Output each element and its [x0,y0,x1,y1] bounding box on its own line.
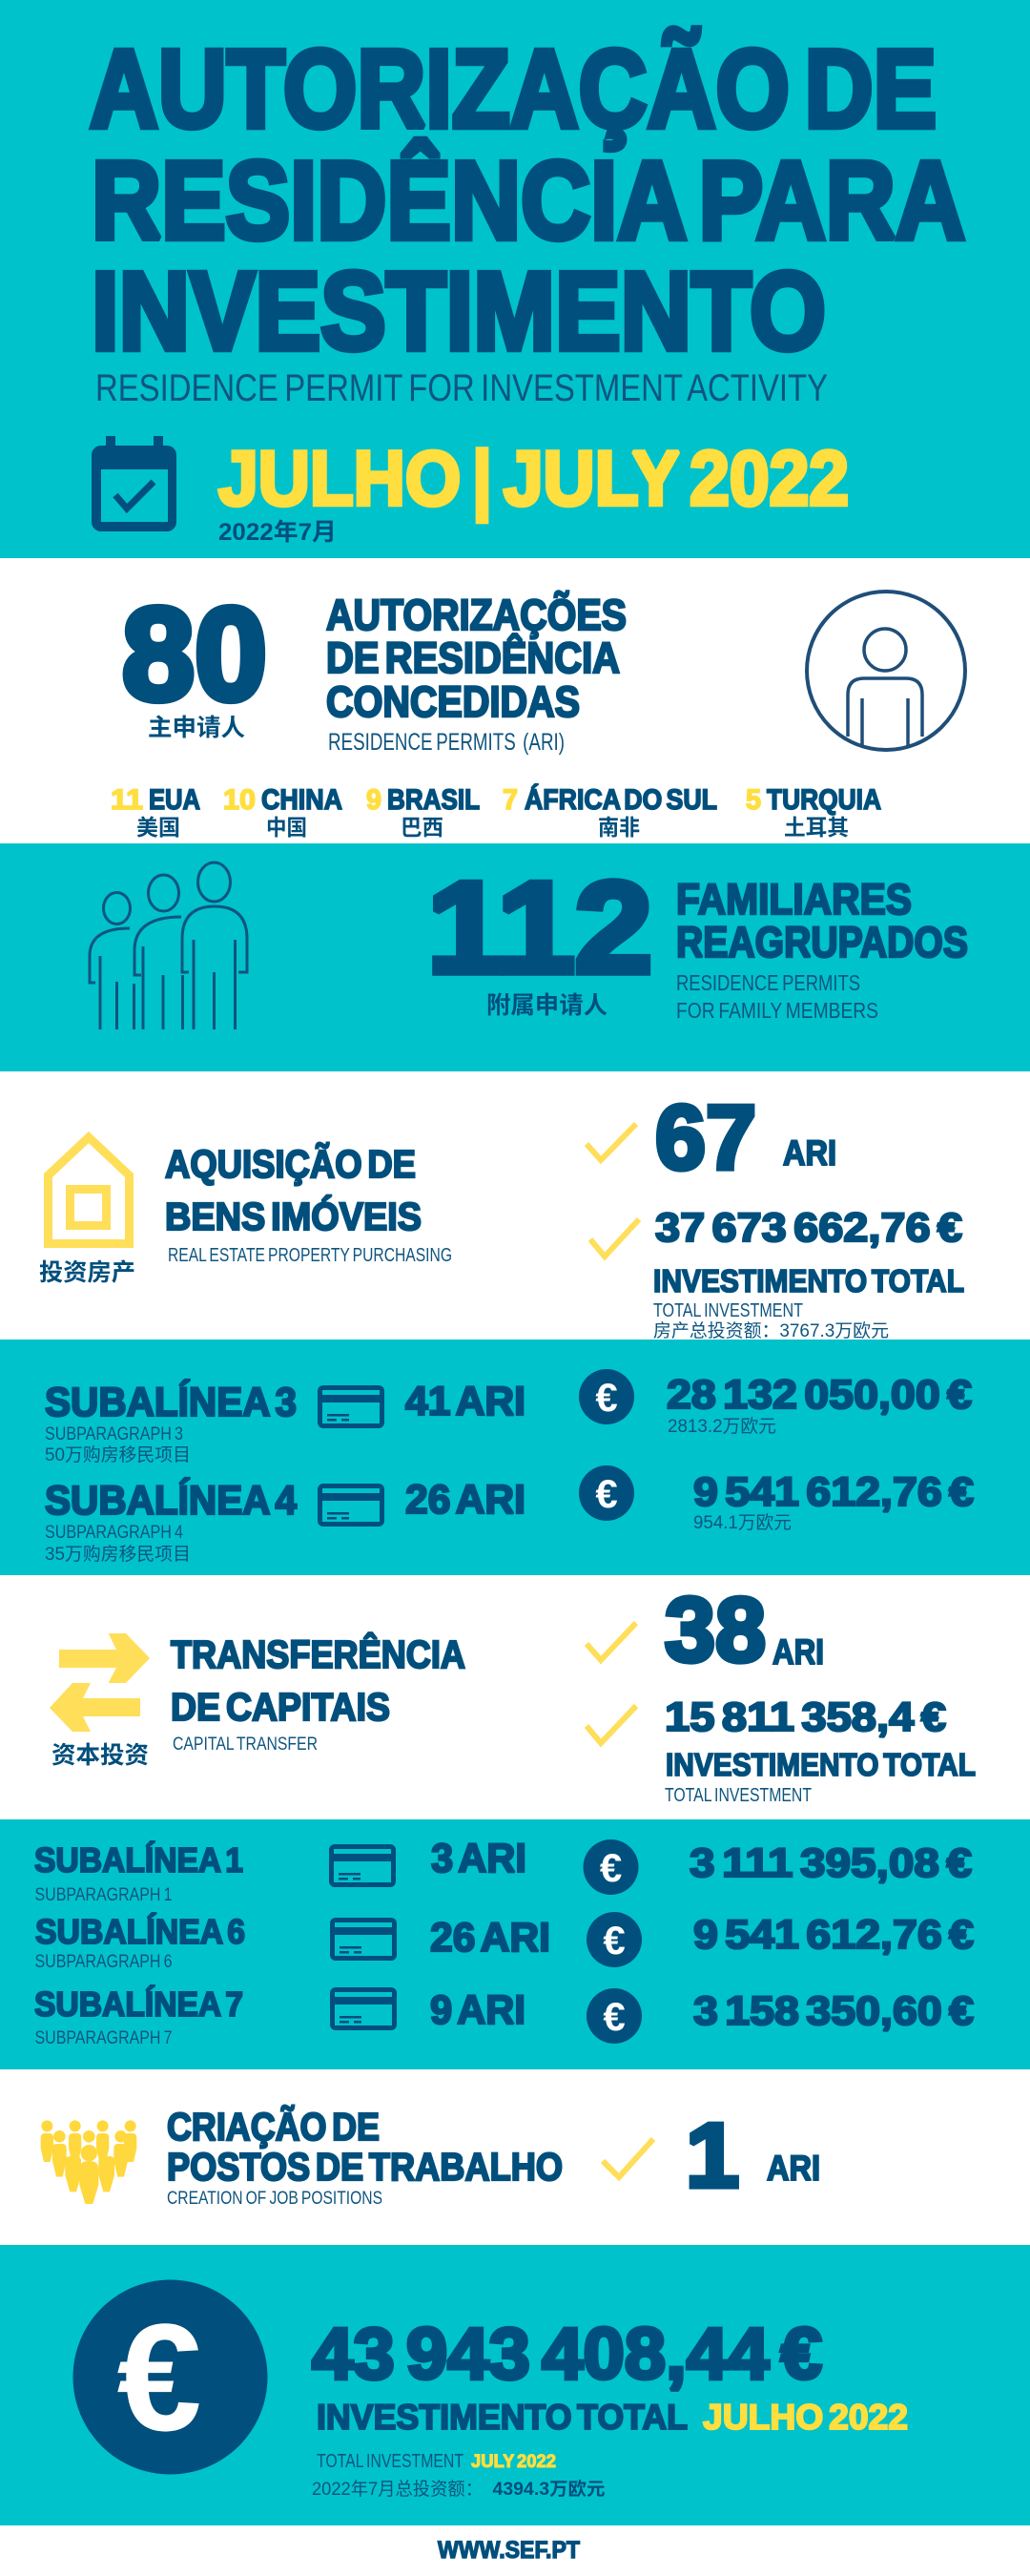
ARI label: ARI [767,2149,820,2188]
icon: euro coin: € [603,1918,626,1963]
row: subparagraph 4: SUBALÍNEA 4 [45,1478,297,1524]
row: subparagraph 6: SUBPARAGRAPH 6 [34,1952,172,1972]
heading line 1: CRIAÇÃO DE [167,2105,380,2149]
row: subparagraph 4: 954.1万欧元 [693,1512,792,1533]
icon: check [587,1623,636,1660]
row: subparagraph 7: 9 ARI [430,1987,525,2033]
heading line 1: AQUISIÇÃO DE [165,1142,416,1186]
icon: check [603,2139,653,2177]
chinese total amount: 4394.3万欧元 [492,2479,605,2500]
country: South Africa: ÁFRICA DO SUL [525,783,717,816]
country: USA [111,784,200,840]
icon: card [330,1987,397,2030]
heading line 1: FAMILIARES [676,875,912,924]
country: Brazil: BRASIL [387,784,480,816]
icon: card [329,1844,396,1887]
icon: euro coin [587,1988,642,2044]
row: subparagraph 3: 41 ARI [405,1379,525,1424]
icon: euro coin: € [600,1845,622,1890]
row: subparagraph 4: SUBPARAGRAPH 4 [45,1523,183,1543]
panel: subparagraphs 1, 6, 7 [0,1819,1030,2069]
row: subparagraph 6: 26 ARI [430,1915,550,1961]
country list [111,783,881,840]
icon: euro coin [579,1465,634,1521]
row: subparagraph 3: 50万购房移民项目 [45,1444,191,1465]
heading line 2: REAGRUPADOS [676,918,968,966]
chinese total: 房产总投资额：3767.3万欧元 [653,1320,889,1341]
heading line 2: DE CAPITAIS [171,1685,390,1729]
row: subparagraph 7: SUBPARAGRAPH 7 [34,2028,172,2048]
english label: TOTAL INVESTMENT [653,1300,803,1321]
country: Brazil: 巴西 [401,815,443,840]
total amount: 37 673 662,76 € [655,1205,962,1251]
english label: CAPITAL TRANSFER [173,1735,318,1755]
number 112: 112 [427,855,652,1000]
icon: family group [90,862,247,1029]
row: subparagraph 3: 2813.2万欧元 [668,1416,776,1437]
row: subparagraph 7: SUBALÍNEA 7 [34,1984,243,2024]
icon: person in circle [807,592,965,750]
country: China: 10 [223,784,256,816]
country: Turkey [746,784,881,840]
country: Brazil [366,784,480,840]
country: South Africa [503,783,717,840]
country: South Africa: 南非 [598,815,640,840]
row: subparagraph 4: 9 541 612,76 € [693,1469,974,1515]
total investment heading: INVESTIMENTO TOTAL [653,1263,964,1298]
row: subparagraph 1: SUBPARAGRAPH 1 [34,1885,172,1905]
panel: capital transfer [0,1575,1030,1819]
country: USA: 美国 [136,815,180,840]
number 38: 38 [665,1579,766,1681]
english label: REAL ESTATE PROPERTY PURCHASING [168,1245,452,1266]
icon: large euro coin: € [117,2292,201,2462]
icon: euro coin: € [603,1994,626,2039]
month label yellow: JULHO 2022 [703,2398,908,2437]
icon: calendar [92,436,176,531]
icon: check [590,1219,639,1257]
country: China [223,784,342,840]
row: subparagraph 3: 28 132 050,00 € [667,1372,972,1418]
main applicant label: 主申请人 [148,715,245,741]
heading line 2: BENS IMÓVEIS [165,1195,422,1238]
row: subparagraph 1: SUBALÍNEA 1 [34,1840,243,1880]
ARI label: ARI [783,1133,836,1173]
number 67: 67 [655,1087,756,1189]
country: Turkey: 5 [746,784,761,816]
icon: check [587,1124,636,1160]
english label: CREATION OF JOB POSITIONS [167,2189,382,2209]
footer website: WWW.SEF.PT [438,2537,580,2564]
row: subparagraph 4: 26 ARI [405,1477,525,1523]
panel: family members [0,843,1030,1071]
heading line 2: DE RESIDÊNCIA [326,634,620,682]
title line 3: INVESTIMENTO [92,249,826,373]
english label line 1: RESIDENCE PERMITS [676,970,860,995]
icon: euro coin: € [595,1471,618,1516]
icon: euro coin: € [595,1375,618,1420]
panel: real estate [0,1071,1030,1341]
row: subparagraph 7: 3 158 350,60 € [693,1988,974,2034]
number 80: 80 [122,581,267,728]
row: subparagraph 3: SUBPARAGRAPH 3 [45,1424,183,1444]
total investment heading: INVESTIMENTO TOTAL [317,2398,688,2437]
total amount: 15 811 358,4 € [665,1694,946,1740]
dependent applicant label: 附属申请人 [486,992,608,1019]
country: USA: 11 [111,784,143,816]
icon: check [587,1706,636,1743]
icon: euro coin [584,1839,639,1895]
heading line 2: POSTOS DE TRABALHO [167,2145,563,2189]
country: Brazil: 9 [366,784,381,816]
row: subparagraph 7 [34,1984,974,2048]
country: Turkey: TURQUIA [767,784,881,816]
icon: group of people [41,2120,136,2204]
panel: subparagraphs 3 and 4 [0,1340,1030,1575]
row: subparagraph 1: 3 ARI [431,1836,526,1881]
panel: total investment [0,2245,1030,2525]
icon: transfer arrows [50,1633,150,1732]
row: subparagraph 1: 3 111 395,08 € [690,1840,972,1886]
icon: card [318,1385,384,1428]
icon: euro coin [579,1369,634,1424]
english label: RESIDENCE PERMITS (ARI) [328,729,565,756]
icon: large euro coin [72,2280,267,2475]
country: China: CHINA [261,784,342,816]
row: subparagraph 6: SUBALÍNEA 6 [35,1912,245,1951]
date heading: JULHO | JULY 2022 [218,436,849,523]
row: subparagraph 3 [45,1369,972,1465]
country: USA: EUA [149,784,200,816]
country: China: 中国 [266,815,307,840]
chinese label: 投资房产 [39,1259,135,1286]
icon: card [318,1484,384,1527]
row: subparagraph 4 [45,1465,974,1565]
grand total amount: 43 943 408,44 € [312,2314,822,2395]
icon: card [330,1918,397,1961]
ARI label: ARI [772,1632,824,1672]
row: subparagraph 4: 35万购房移民项目 [45,1544,191,1565]
heading line 3: CONCEDIDAS [326,677,580,726]
subtitle: RESIDENCE PERMIT FOR INVESTMENT ACTIVITY [95,367,828,409]
country: Turkey: 土耳其 [784,815,849,840]
number 1: 1 [686,2105,739,2207]
date in Chinese: 2022年7月 [218,519,337,546]
row: subparagraph 3: SUBALÍNEA 3 [45,1380,297,1425]
english month yellow: JULY 2022 [471,2452,556,2472]
row: subparagraph 6 [34,1912,974,1972]
english label: TOTAL INVESTMENT [317,2451,464,2472]
panel: residence permits [0,558,1030,843]
chinese label: 资本投资 [52,1742,149,1769]
english label line 2: FOR FAMILY MEMBERS [676,998,878,1023]
total investment heading: INVESTIMENTO TOTAL [666,1747,976,1782]
icon: euro coin [587,1912,642,1967]
country: South Africa: 7 [503,784,518,816]
row: subparagraph 1 [34,1836,972,1905]
panel: header [0,0,1030,558]
heading line 1: AUTORIZAÇÕES [326,591,627,639]
heading line 1: TRANSFERÊNCIA [171,1632,465,1676]
row: subparagraph 6: 9 541 612,76 € [693,1912,974,1958]
panel: job creation [0,2069,1030,2245]
icon: house [48,1137,130,1244]
chinese total label: 2022年7月总投资额： [312,2479,483,2500]
english label: TOTAL INVESTMENT [665,1785,812,1806]
